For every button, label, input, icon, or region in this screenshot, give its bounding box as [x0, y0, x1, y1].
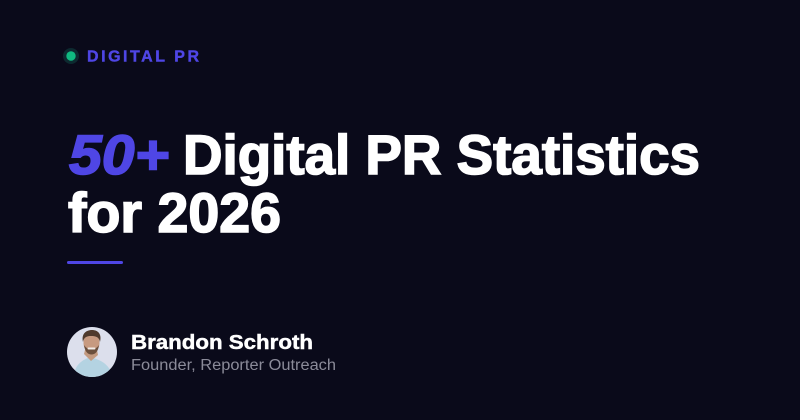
eyebrow: Digital PR category tag — [63, 48, 199, 66]
title line 2: for 2026 — [68, 181, 281, 244]
title — [68, 123, 700, 244]
author name: Brandon Schroth — [131, 332, 313, 354]
eyebrow label: DIGITAL PR — [87, 48, 199, 66]
author block — [67, 327, 336, 380]
title line 1: Digital PR Statistics — [183, 123, 700, 186]
author role: Founder, Reporter Outreach — [131, 357, 336, 374]
accent divider — [67, 261, 123, 264]
icon: author avatar portrait — [67, 327, 117, 380]
icon: green status dot — [63, 48, 79, 64]
title highlight: 50+: 50+ — [69, 123, 169, 186]
